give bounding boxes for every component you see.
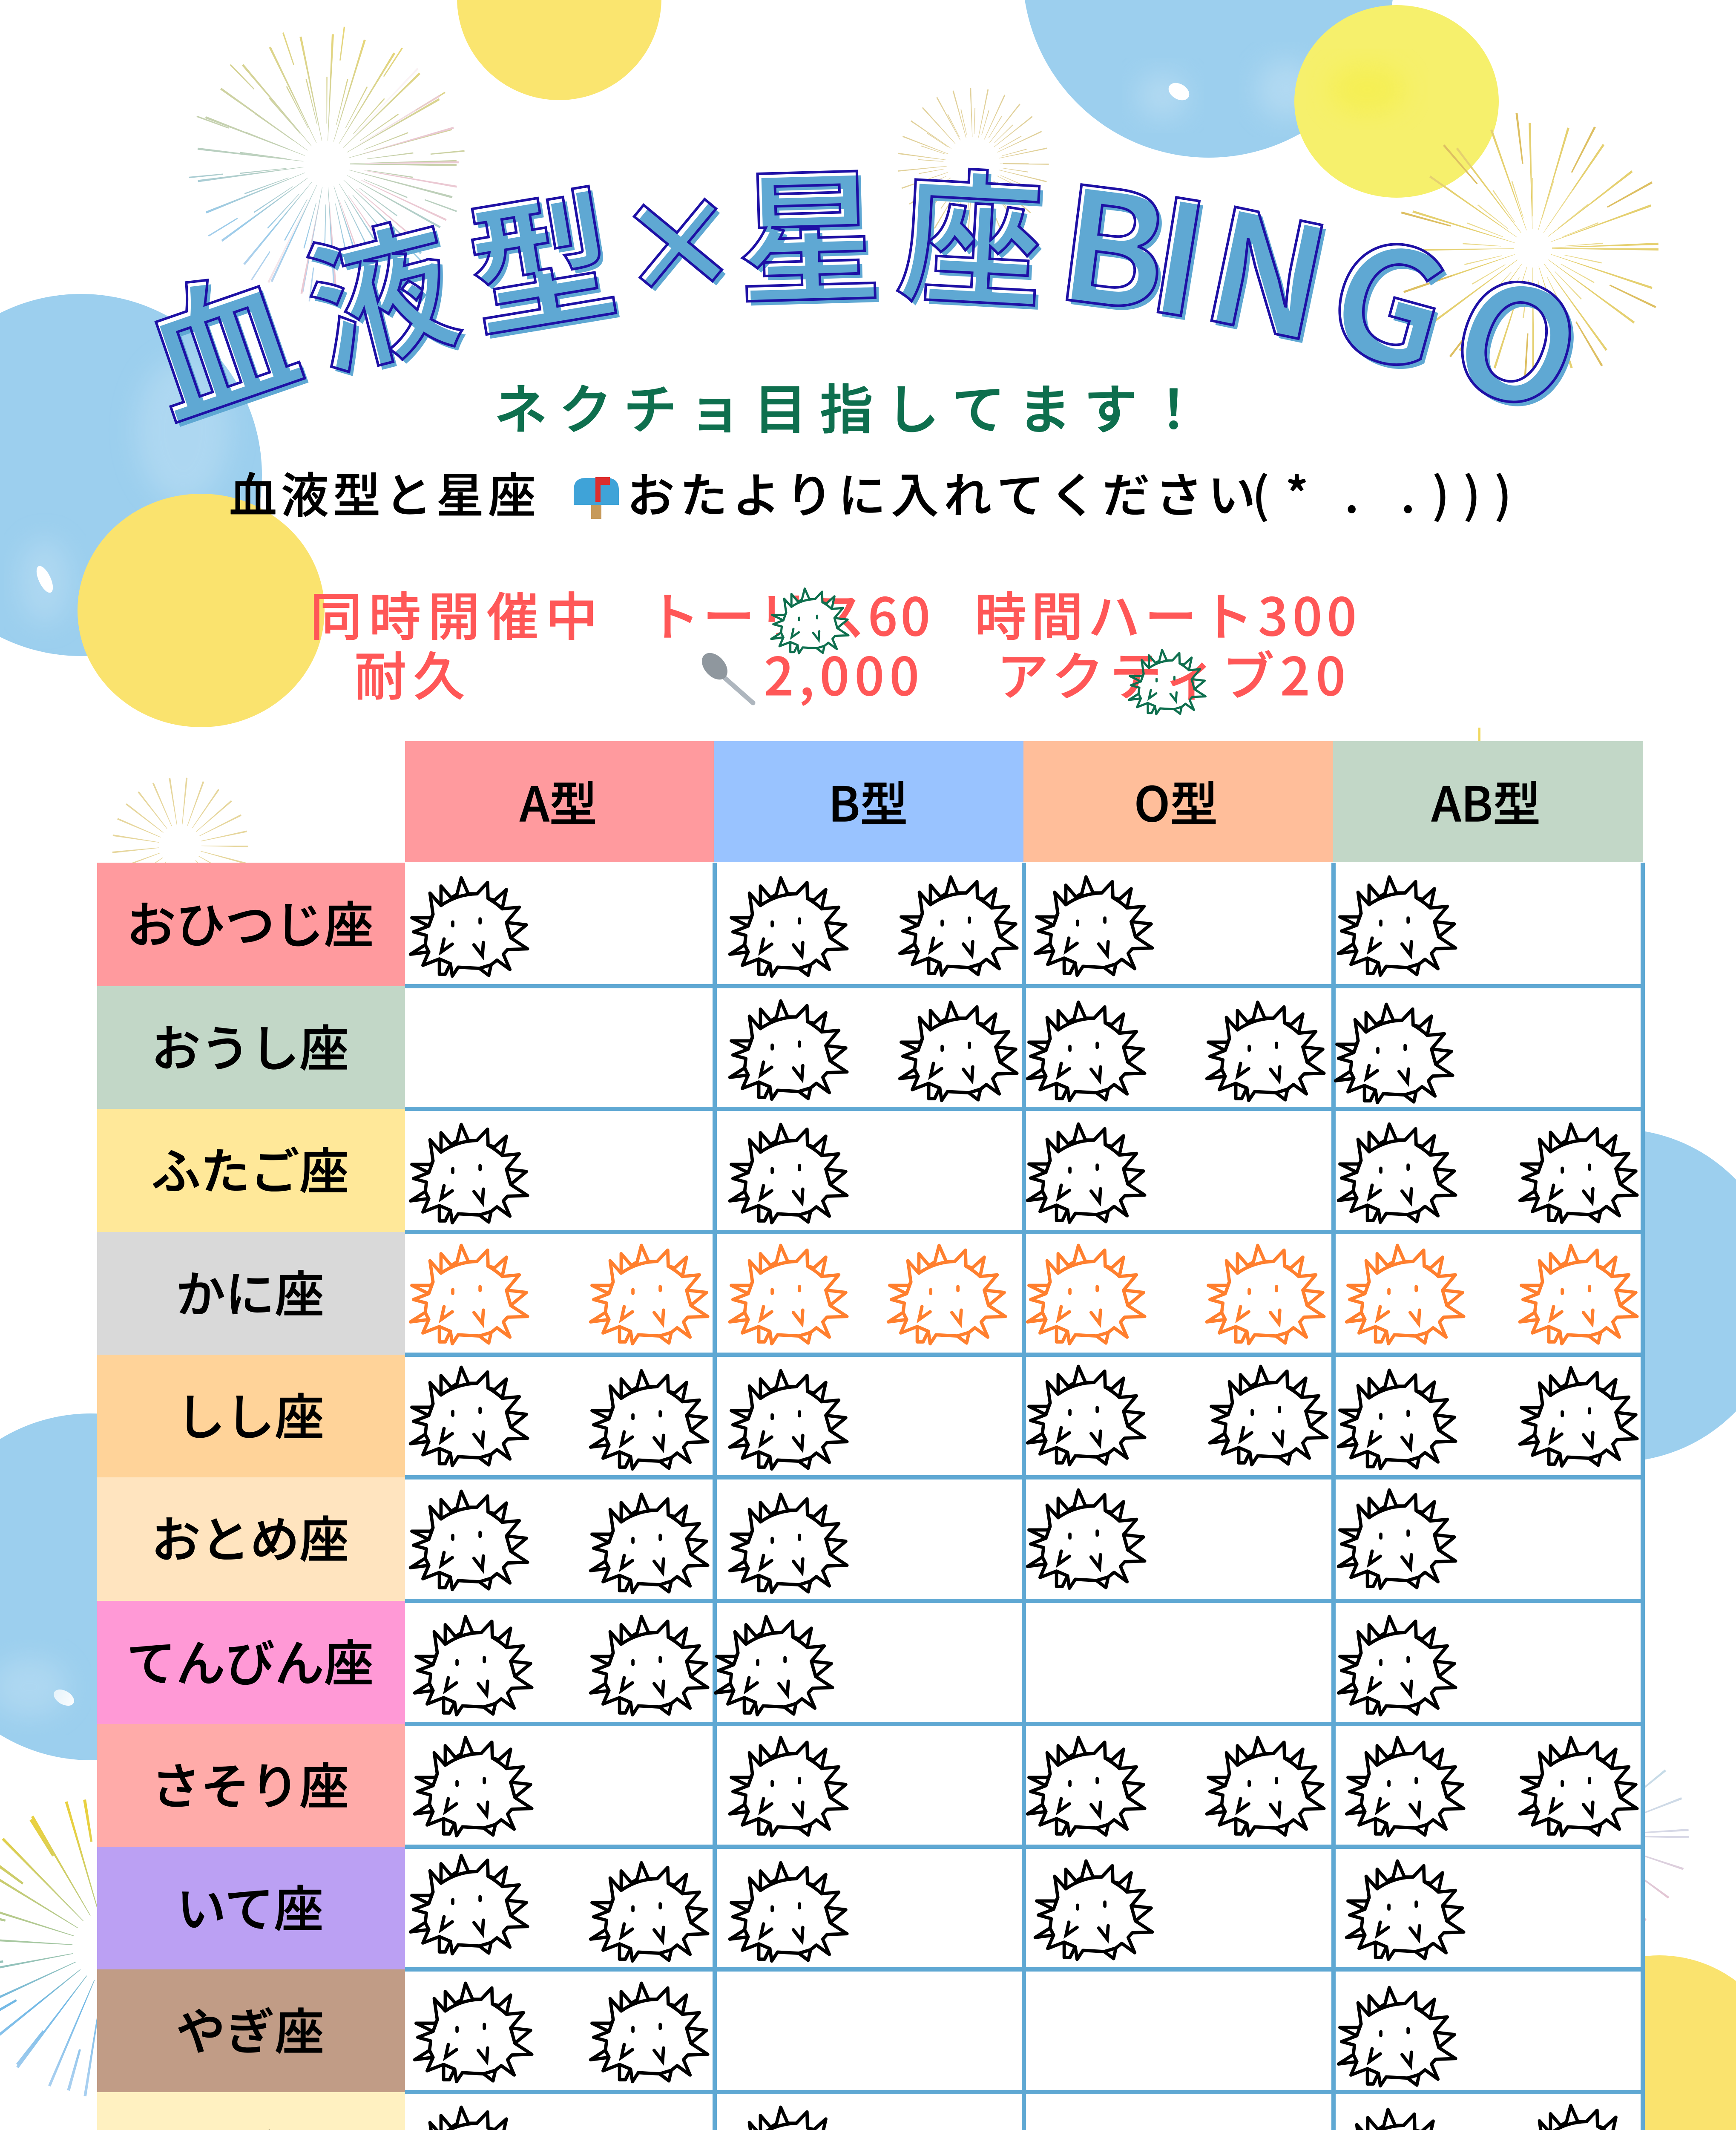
urchin r5 O1: [1028, 1367, 1145, 1465]
sign labels: [97, 863, 405, 2130]
watercolor circle: lower right yellow: [1532, 1955, 1736, 2130]
firework: colourful top left: [205, 43, 448, 285]
urchin r2 O2: [1207, 1002, 1324, 1100]
watercolor circle: top right yellow: [1294, 5, 1499, 198]
urchin r5 AB1: [1339, 1370, 1456, 1468]
sign: てんびん座: [97, 1601, 405, 1724]
event line 1: label: 同時開催中: [310, 576, 598, 651]
urchin r7 B1: [716, 1617, 833, 1715]
header: AB: AB型: [1431, 766, 1541, 835]
sign: おうし座: [97, 986, 405, 1109]
urchin r4 O1 orange: [1028, 1246, 1145, 1344]
instruction line: left part: 血液型と星座: [229, 458, 536, 527]
firework: gold right: [1422, 138, 1644, 359]
sign: さそり座: さそり座: [151, 1747, 349, 1819]
sign: ふたご座: ふたご座: [151, 1132, 349, 1203]
urchin r5 B1: [730, 1371, 847, 1469]
title: curved text: BINGO: [1047, 118, 1614, 459]
title: curved text: ×: [607, 142, 747, 331]
urchin r8 B1: [730, 1738, 847, 1836]
firework tick above AB header: [1478, 728, 1480, 741]
firework: small gold top middle: [922, 112, 1024, 215]
urchin r7 A2: [591, 1617, 708, 1715]
urchin r1 B1: [730, 878, 847, 976]
urchin r4 AB1 orange: [1347, 1246, 1464, 1344]
sign: さそり座: [97, 1724, 405, 1847]
watercolor circle: top right blue: [1023, 0, 1395, 158]
title: curved text: ×: [607, 142, 747, 331]
sign: しし座: [97, 1355, 405, 1477]
icon: mailbox: [574, 477, 619, 519]
sign: やぎ座: [97, 1969, 405, 2092]
urchin r10 A2: [591, 1983, 708, 2081]
title: curved text: BINGO: [1051, 122, 1618, 463]
sign: かに座: [97, 1232, 405, 1355]
sign: てんびん座: てんびん座: [126, 1624, 374, 1695]
urchin r5 A1: [411, 1367, 528, 1465]
urchin r1 A: [411, 878, 528, 976]
urchin r5 O2: [1210, 1367, 1327, 1465]
column headers: [405, 741, 1643, 862]
urchin r11 A1: [411, 2107, 528, 2130]
urchin r5 AB2: [1520, 1368, 1637, 1466]
header: O: O型: [1134, 766, 1218, 835]
watercolor circle: mid right blue: [1450, 1129, 1736, 1462]
header: A: A型: [520, 766, 597, 835]
urchin r3 O1: [1028, 1124, 1145, 1222]
sign: おとめ座: [97, 1477, 405, 1601]
sign: いて座: いて座: [177, 1870, 323, 1941]
title: curved text: 血液型: [119, 142, 632, 462]
sign: しし座: しし座: [176, 1378, 324, 1449]
urchin r1 AB1: [1339, 877, 1456, 975]
urchin marks: [411, 877, 1637, 2130]
urchin r10 AB1: [1339, 1988, 1456, 2086]
urchin r10 A1: [415, 1983, 532, 2081]
icon: green urchin over torus: [771, 589, 848, 653]
header: AB: [1333, 741, 1643, 862]
watercolor circle: left yellow: [78, 494, 325, 727]
urchin r3 B1: [730, 1125, 847, 1223]
urchin r4 B2 orange: [888, 1246, 1006, 1344]
watercolor circle: top yellow: [457, 0, 661, 100]
firework: pale right edge: [1645, 1770, 1689, 1921]
event line 2: spoon count: 2,000: [764, 635, 919, 711]
firework: colourful left edge: [0, 1799, 97, 2097]
urchin r8 AB2: [1520, 1738, 1637, 1836]
sign: やぎ座: やぎ座: [176, 1992, 324, 2064]
urchin r3 AB2: [1520, 1124, 1637, 1222]
urchin r2 AB1: [1336, 1005, 1453, 1102]
watercolor circle: mid left blue: [0, 1413, 264, 1760]
urchin r2 B1: [730, 1001, 847, 1099]
watercolor circle: left blue: [0, 294, 262, 656]
urchin r8 O1: [1028, 1738, 1145, 1836]
sign: いて座: [97, 1847, 405, 1969]
urchin r9 B1: [730, 1863, 847, 1961]
sign: みずがめ座: [97, 2092, 405, 2130]
event line 1: torus: トーリス60: [648, 576, 930, 651]
urchin r6 AB1: [1339, 1490, 1456, 1588]
urchin r2 B2: [900, 1002, 1017, 1100]
urchin r4 A2 orange: [591, 1246, 708, 1344]
title: curved text: 星座: [733, 121, 1049, 338]
header: A: [405, 741, 714, 862]
instruction line: right part: おたよりに入れてください(* . .))): [627, 458, 1512, 527]
urchin r3 AB1: [1339, 1124, 1456, 1222]
sign: おとめ座: おとめ座: [151, 1500, 349, 1572]
event line 2: stamina: 耐久: [354, 635, 465, 711]
header: B: B型: [828, 766, 908, 835]
sign: おひつじ座: [97, 863, 405, 986]
urchin r2 O1: [1028, 1002, 1145, 1100]
event line 1: hearts: 時間ハート300: [974, 576, 1357, 651]
title: curved text: BINGO: [1047, 118, 1614, 459]
urchin r4 AB2 orange: [1520, 1246, 1637, 1344]
header: B: [714, 741, 1023, 862]
urchin r11 B1: [730, 2107, 847, 2130]
urchin r8 A1: [415, 1738, 532, 1836]
urchin r9 A1: [411, 1856, 528, 1954]
urchin r5 A2: [591, 1371, 708, 1469]
title: curved text: ×: [611, 146, 751, 336]
grid cells background: [405, 863, 1643, 2130]
subtitle: green: ネクチョ 目指してます！: [494, 367, 1200, 444]
bingo table: [97, 741, 1645, 2130]
urchin r9 O1: [1035, 1861, 1153, 1959]
urchin r1 B2: [900, 877, 1017, 975]
urchin r3 A: [411, 1125, 528, 1223]
grid lines: [405, 863, 1645, 2130]
urchin r6 A1: [411, 1491, 528, 1589]
firework: gold above table left: [135, 801, 225, 890]
urchin r8 AB1: [1347, 1738, 1464, 1836]
title: curved text: 星座: [733, 121, 1049, 338]
urchin r9 A2: [591, 1863, 708, 1961]
urchin r9 AB1: [1347, 1861, 1464, 1959]
title: curved text: 星座: [737, 125, 1052, 342]
icon: green urchin over active: [1129, 650, 1205, 714]
urchin r4 B1 orange: [730, 1246, 847, 1344]
urchin r1 O1: [1035, 877, 1153, 975]
urchin r8 O2: [1207, 1738, 1324, 1836]
urchin r6 O1: [1028, 1490, 1145, 1588]
sign: かに座: かに座: [176, 1255, 324, 1327]
urchin r4 A1 orange: [411, 1246, 528, 1344]
event line 2: active: アクティブ20: [997, 635, 1345, 711]
urchin r7 A1: [415, 1617, 532, 1715]
urchin r4 O2 orange: [1207, 1246, 1324, 1344]
sign: おうし座: おうし座: [151, 1009, 349, 1081]
title: curved text: 血液型: [115, 138, 628, 458]
title: curved text: [115, 118, 1618, 463]
title: curved text: 血液型: [115, 138, 628, 458]
sign: ふたご座: [97, 1109, 405, 1232]
header: O: [1023, 741, 1333, 862]
urchin r11 AB2: [1520, 2106, 1637, 2130]
sign: おひつじ座: おひつじ座: [126, 886, 374, 957]
icon: spoon: [697, 648, 753, 703]
urchin r7 AB1: [1339, 1617, 1456, 1715]
urchin r11 AB1: [1337, 2110, 1454, 2130]
urchin r6 B1: [730, 1494, 847, 1592]
urchin r6 A2: [591, 1494, 708, 1592]
